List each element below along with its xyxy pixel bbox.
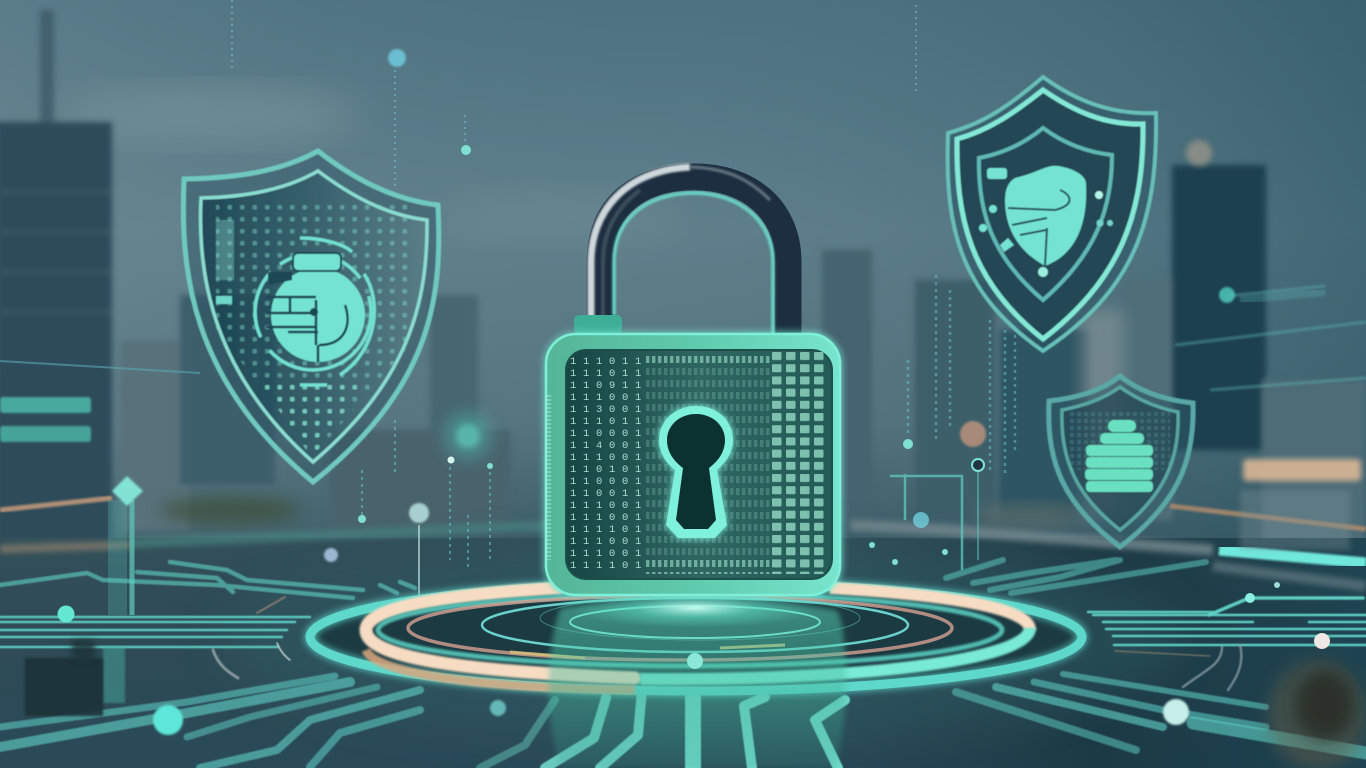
blurred city skyline bbox=[0, 10, 1366, 550]
right trace glow dots bbox=[1163, 593, 1330, 725]
outer ring bbox=[310, 583, 1082, 691]
pale mid-distance building bbox=[1082, 310, 1124, 520]
hazy lights and distant bushes bbox=[160, 140, 1212, 525]
ring underside, left bbox=[366, 650, 635, 690]
cream ring, right side bbox=[830, 588, 1030, 630]
binary digit columns: 1 1 1 0 1 1 bbox=[570, 368, 642, 380]
stacked emblem bbox=[1085, 420, 1153, 492]
circuit traces: bottom centre bbox=[480, 690, 845, 768]
binary digit columns: 1 1 1 0 1 1 bbox=[570, 416, 642, 428]
shield emblem bbox=[216, 238, 374, 385]
building: low left blocks bbox=[120, 295, 510, 530]
building: centre right towers bbox=[822, 250, 1173, 520]
fine data grid bbox=[645, 356, 771, 574]
binary digit columns: 1 1 0 0 1 1 bbox=[570, 488, 642, 500]
teal ring, front right bbox=[640, 628, 1030, 679]
shield data dots bbox=[216, 205, 412, 455]
shield emblem bbox=[979, 166, 1113, 277]
holographic base rings bbox=[310, 583, 1082, 691]
shield: top right bbox=[948, 77, 1156, 351]
circuit traces: left bbox=[0, 562, 420, 768]
building: left tower bbox=[0, 10, 112, 542]
left trace glow dots bbox=[58, 606, 183, 735]
binary digit columns: 1 1 0 0 0 1 bbox=[570, 476, 642, 488]
lock reflection on the floor bbox=[549, 603, 846, 768]
circuit traces: right bbox=[946, 560, 1366, 753]
binary digit columns: 1 1 0 0 0 1 bbox=[570, 428, 642, 440]
binary digit columns: 1 1 4 0 0 1 bbox=[570, 440, 642, 452]
floating data dots bbox=[232, 0, 1280, 716]
teal inner rings bbox=[378, 594, 1002, 666]
centre glow and marker bbox=[570, 588, 820, 669]
floor edge bands bbox=[0, 525, 1366, 586]
binary digit columns: 1 1 1 0 0 1 bbox=[570, 512, 642, 524]
binary digit columns: 1 1 1 0 0 1 bbox=[570, 500, 642, 512]
lock body bbox=[546, 334, 840, 595]
cream ring, left side bbox=[366, 588, 635, 678]
shield: left bbox=[183, 151, 439, 482]
blurred foreground objects bbox=[25, 640, 1366, 768]
lock face panel bbox=[566, 350, 832, 579]
binary digit columns: 1 1 1 1 0 1 bbox=[570, 560, 642, 572]
binary digit columns: 1 1 1 0 0 1 bbox=[570, 392, 642, 404]
shield data stripes bbox=[1070, 410, 1170, 470]
binary digit columns: 1 1 0 1 0 1 bbox=[570, 464, 642, 476]
building: right tower bbox=[1172, 165, 1366, 550]
floor bbox=[0, 525, 1366, 768]
keyhole bbox=[659, 406, 733, 538]
right data bars and accents bbox=[890, 286, 1366, 570]
ring platform bbox=[312, 585, 1080, 689]
shackle bbox=[591, 167, 788, 335]
binary digit columns: 1 1 3 0 0 1 bbox=[570, 404, 642, 416]
binary digit columns: 1 1 1 0 1 1 bbox=[570, 356, 642, 368]
binary digit columns: 1 1 1 1 0 1 bbox=[570, 524, 642, 536]
shield: small right bbox=[1049, 376, 1193, 547]
binary digit columns: 1 1 1 0 0 1 bbox=[570, 548, 642, 560]
shackle collar bbox=[574, 315, 622, 334]
left data bars and accents bbox=[0, 361, 200, 615]
binary digit columns bbox=[570, 356, 642, 572]
binary digit columns: 1 1 1 0 0 1 bbox=[570, 536, 642, 548]
padlock bbox=[546, 167, 840, 595]
binary digit columns: 1 1 1 0 0 1 bbox=[570, 452, 642, 464]
binary digit columns: 1 1 0 9 1 1 bbox=[570, 380, 642, 392]
bright data blocks bbox=[772, 352, 828, 574]
